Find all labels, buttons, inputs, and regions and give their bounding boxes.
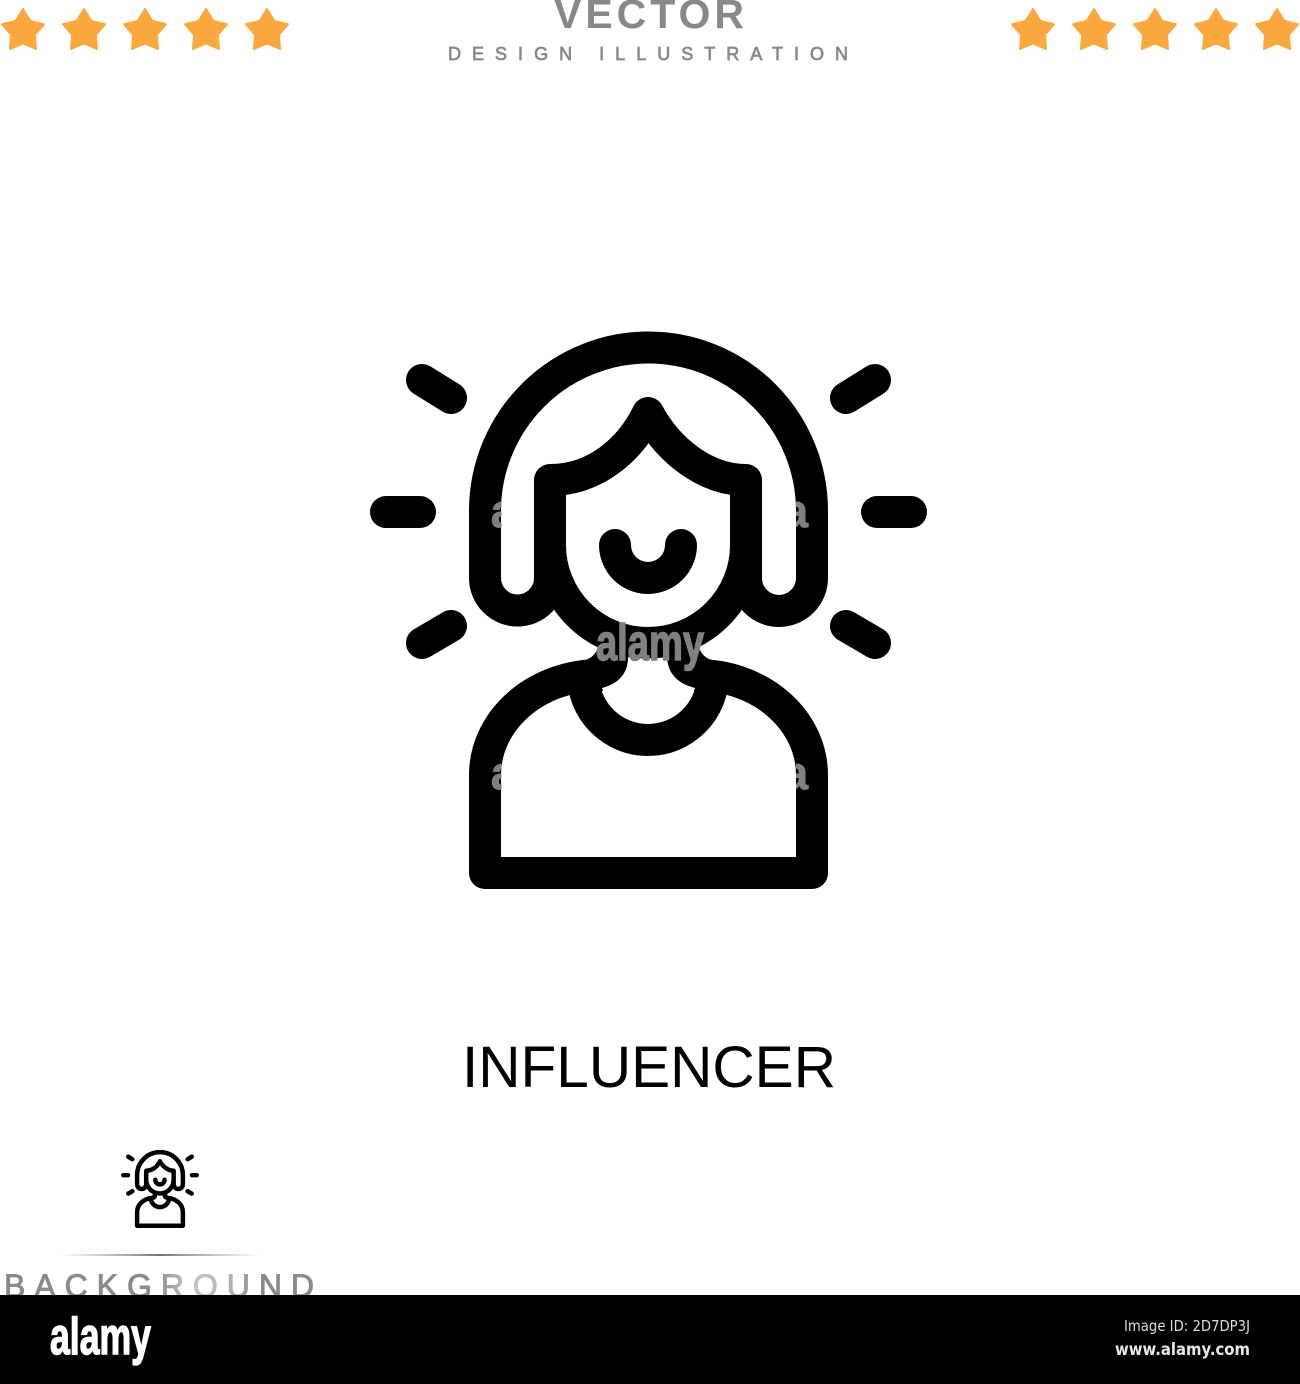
watermark: alamy over icon: alamy [596,614,704,671]
icon: rays [386,380,911,643]
header: DESIGN ILLUSTRATION: DESIGN ILLUSTRATION [448,44,848,64]
star rating: right [1012,9,1298,49]
title: INFLUENCER: INFLUENCER [462,1035,836,1100]
footer logo: alamy: alamy [50,1308,151,1366]
icon: body [485,675,812,873]
main icon: influencer [386,348,911,873]
watermark: faint letters on icon strokes: a [491,747,515,799]
watermark: faint letters on icon strokes: a [784,747,808,799]
divider line above BACKGROUND [60,1254,260,1256]
icon: smile [615,545,681,578]
icon: neck joins [578,645,719,692]
watermark: faint letters on icon strokes: a [784,485,808,537]
watermark: faint letters on icon strokes [491,485,808,799]
star rating: left [2,9,288,49]
footer: website: www.alamy.com [1115,1340,1250,1359]
watermark: faint letters on icon strokes: a [491,485,515,537]
icon: neck opening [602,657,695,722]
footer: image id: Image ID: 2D7DP3J [1124,1317,1250,1335]
icon: face [550,545,746,643]
icon: collar [583,675,713,740]
footer bar [0,1295,1300,1384]
label: BACKGROUND: BACKGROUND [4,1268,314,1304]
small icon: influencer [123,1152,197,1226]
icon: hair [485,348,812,611]
